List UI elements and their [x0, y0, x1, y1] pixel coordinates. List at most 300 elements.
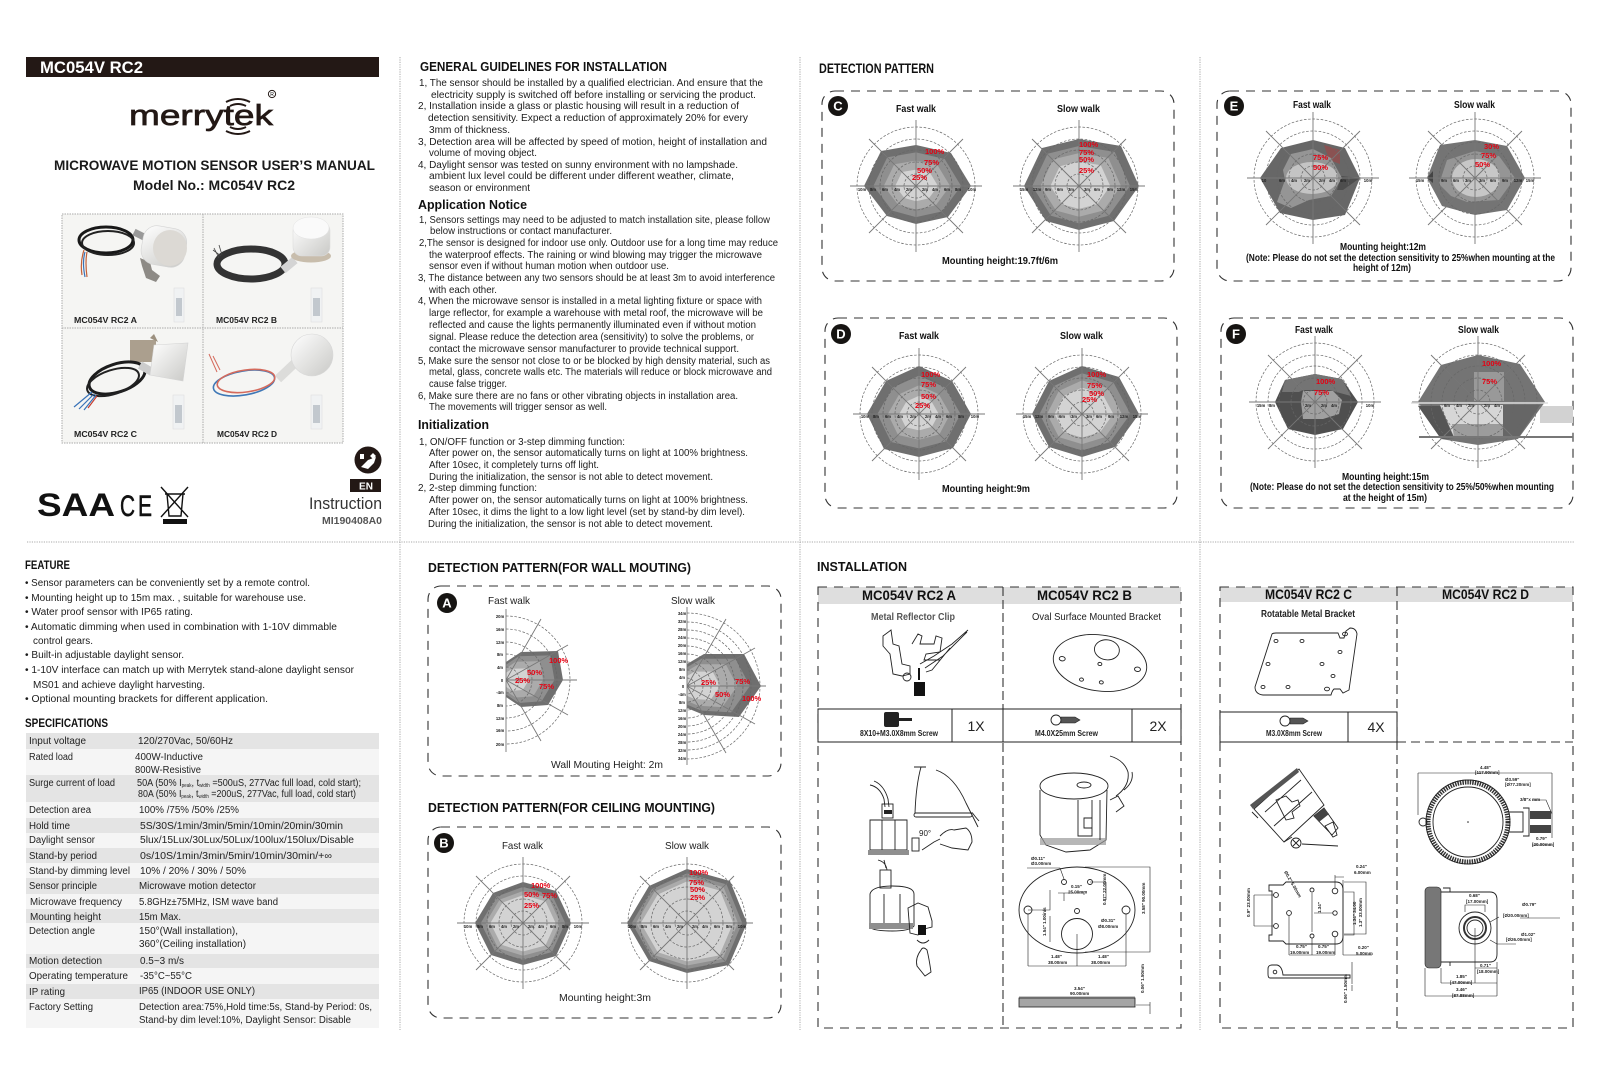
chart: C slow walk — [1013, 120, 1145, 252]
icon: screw A and label: 8X10+M3.0X8mm Screw — [860, 729, 939, 738]
spec table: Mounting height — [30, 912, 101, 923]
spec table: 5lux/15Lux/30Lux/50Lux/100lux/150lux/Disable — [140, 835, 354, 846]
initialization list: During the initialization, the sensor is not able to detect movement. — [429, 472, 713, 483]
chart: B fast walk: 8m — [477, 924, 483, 929]
chart: B fast walk: 10m — [464, 924, 472, 929]
chart: E slow walk: 3m — [1479, 178, 1485, 183]
chart: A fast walk: 8m — [497, 652, 503, 657]
chart: B fast walk: 4m — [501, 924, 507, 929]
chart: E fast walk: 4m — [1329, 178, 1335, 183]
chart: A slow walk: 12m — [678, 659, 686, 664]
chart: B fast walk: 2m — [513, 924, 519, 929]
panel: general guidelines — [418, 59, 778, 530]
chart: B fast walk: 10m — [574, 924, 582, 929]
chart: A slow walk: 8m — [679, 700, 685, 705]
chart: C slow walk: 6m — [1094, 187, 1100, 192]
application notice list: metal, glass, concrete walls etc. The materials will reduce or block microwave and — [429, 367, 772, 378]
application notice list: 1, Sensors settings may need to be adjusted to match installation site, please follow — [419, 215, 771, 226]
icon: screw C and label: M3.0X8mm Screw — [1266, 729, 1323, 738]
spec table: 10% / 20% / 30% / 50% — [140, 866, 246, 877]
drawing: rotatable bracket dimensions: 6.00mm — [1354, 870, 1371, 875]
chart: A slow walk: 32m — [678, 748, 686, 753]
drawing: sensor side view: [47.00mm] — [1450, 980, 1473, 985]
chart: B slow walk: 10m — [628, 924, 636, 929]
product B: MC054V RC2 B — [216, 316, 277, 325]
drawing: rotatable bracket dimensions: 19.00mm — [1290, 950, 1309, 955]
chart: F fast walk: 75% — [1314, 388, 1329, 397]
spec table: Detection area — [29, 805, 91, 816]
chart: F fast walk — [1249, 336, 1381, 468]
chart: A slow walk: 16m — [678, 651, 686, 656]
product D: MC054V RC2 D — [217, 430, 277, 439]
panel: pattern C: Slow walk — [1057, 103, 1100, 115]
column heading C: MC054V RC2 C — [1265, 586, 1352, 602]
chart: A slow walk: 20m — [678, 643, 686, 648]
spec table: IP rating — [29, 987, 65, 998]
application notice list: large reflector, for example a warehouse with metal roof, the microwave will be — [429, 308, 763, 319]
chart: B slow walk: 8m — [641, 924, 647, 929]
logo: merrytek: merrytek — [129, 100, 274, 132]
chart: F fast walk: 15m — [1257, 403, 1265, 408]
application notice list: reflected and cause the lights permanently illuminated even if without motion — [429, 320, 756, 331]
chart: D slow walk: 75% — [1087, 381, 1102, 390]
drawing: sensor top view: 3/8"x mm — [1520, 797, 1540, 802]
chart: F fast walk: 2m — [1305, 403, 1311, 408]
drawing: rotatable bracket — [1255, 628, 1357, 695]
feature list: MS01 and achieve daylight harvesting. — [33, 680, 205, 691]
caption: E mounting note: height of 12m) — [1353, 262, 1411, 274]
chart: C slow walk: 12m — [1033, 187, 1041, 192]
chart: C fast walk: 10m — [968, 187, 976, 192]
drawing: oval bracket side view: 3.54" — [1074, 986, 1085, 991]
chart: D slow walk: 15m — [1133, 414, 1141, 419]
drawing: sensor side view: [Ø20.00mm] — [1503, 913, 1529, 918]
chart: B slow walk: 2m — [677, 924, 683, 929]
icon: screw C and label — [1266, 716, 1323, 738]
drawing: L bar profile: 0.06" 1.50mm — [1343, 974, 1348, 1003]
product B — [213, 217, 331, 325]
chart: C fast walk: 4m — [894, 187, 900, 192]
chart: D fast walk — [853, 348, 985, 480]
chart: F slow walk: 75% — [1482, 377, 1497, 386]
chart: F slow walk: 100% — [1482, 359, 1502, 368]
heading: feature: FEATURE — [25, 558, 70, 572]
drawing: oval bracket dimensions: 3.58" 90.00mm — [1141, 883, 1146, 914]
chart: B fast walk — [457, 857, 589, 989]
chart: A fast walk: 50% — [527, 668, 542, 677]
chart: D slow walk: 50% — [1089, 389, 1104, 398]
chart: D slow walk: 9m — [1108, 414, 1114, 419]
chart: D fast walk: 10m — [861, 414, 869, 419]
drawing: reflector clip installation: 90° — [919, 829, 931, 838]
chart: E slow walk: 9m — [1502, 178, 1508, 183]
chart: D slow walk: 12m — [1035, 414, 1043, 419]
guidelines list: season or environment — [429, 183, 530, 194]
chart: A slow walk: 0 — [682, 684, 685, 689]
panel: pattern F: Fast walk — [1295, 324, 1333, 336]
chart: C fast walk: 10m — [858, 187, 866, 192]
chart: D fast walk: 6m — [885, 414, 891, 419]
caption: D mounting height: Mounting height:9m — [942, 483, 1030, 495]
chart: C fast walk: 6m — [944, 187, 950, 192]
logo: merrytek — [129, 90, 276, 134]
initialization list: After 10sec, it dims the light to a low light level (set by stand-by dim level). — [429, 507, 745, 518]
drawing: oval bracket dimensions: Ø8.00mm — [1098, 924, 1118, 929]
spec table: Microwave frequency — [30, 897, 122, 908]
drawing: sensor top view: [Ø77.20mm] — [1505, 782, 1531, 787]
column heading B: MC054V RC2 B — [1037, 587, 1132, 603]
chart: F slow walk: 2m — [1484, 403, 1490, 408]
application notice list: sensor even if without human motion when outdoor use. — [429, 261, 669, 272]
chart: C slow walk: 6m — [1057, 187, 1063, 192]
spec table — [26, 733, 379, 1028]
spec table: Detection area:75%,Hold time:5s, Stand-by Period: 0s, — [139, 1002, 372, 1013]
panel: pattern A: A — [442, 596, 452, 610]
panel: features — [25, 558, 355, 705]
drawing: rotatable bracket dimensions — [1246, 864, 1373, 956]
panel: installation C and D — [1220, 586, 1573, 1028]
chart: D fast walk: 100% — [921, 370, 941, 379]
chart: E slow walk — [1409, 112, 1541, 244]
drawing: oval bracket dimensions: 1.54" 1.00in/s — [1042, 907, 1047, 936]
drawing: sensor side view: Ø1.02" — [1521, 932, 1535, 937]
spec table: Detection angle — [29, 926, 95, 937]
chart: A fast walk: 16m — [496, 627, 504, 632]
icon: screw A and label — [860, 712, 939, 738]
spec table: peak — [181, 794, 192, 800]
chart: D slow walk: 12m — [1120, 414, 1128, 419]
chart: E slow walk: 50% — [1475, 160, 1490, 169]
drawing: sensor top view: [20.00mm] — [1532, 842, 1555, 847]
initialization list: After 10sec, it completely turns off light. — [429, 460, 599, 471]
chart: C fast walk: 4m — [932, 187, 938, 192]
chart: F slow walk: 4m — [1456, 403, 1462, 408]
panel: pattern C — [822, 91, 1174, 281]
chart: A slow walk: 34m — [678, 611, 686, 616]
drawing: sensor side view: [18.00mm] — [1477, 969, 1500, 974]
drawing: sensor top view — [1418, 765, 1555, 864]
spec table: Stand-by period — [29, 851, 97, 862]
drawing: oval bracket dimensions: 38.00mm — [1091, 960, 1110, 965]
application notice list: with each other. — [428, 285, 497, 296]
panel: specifications — [25, 716, 379, 1028]
product A — [74, 223, 189, 325]
panel: pattern E: Fast walk — [1293, 99, 1331, 111]
chart: A slow walk: 28m — [678, 740, 686, 745]
drawing: rotatable bracket dimensions: 0.75" — [1318, 944, 1329, 949]
chart: E fast walk — [1247, 112, 1379, 244]
caption: E mounting note: Mounting height:12m — [1340, 241, 1426, 253]
chart: A fast walk: 75% — [539, 682, 554, 691]
spec table: Factory Setting — [29, 1002, 93, 1013]
chart: B slow walk: 10m — [738, 924, 746, 929]
application notice list: 4, When the microwave sensor is installed in a metal lighting fixture or space with — [418, 296, 762, 307]
feature list: • Mounting height up to 15m max. , suitable for warehouse use. — [25, 593, 306, 604]
panel: pattern C: C — [833, 98, 843, 114]
icon: screw B and label: M4.0X25mm Screw — [1035, 729, 1099, 738]
drawing: sensor top view: 0.79" — [1536, 836, 1547, 841]
drawing: sensor side view: 0.71" — [1480, 963, 1491, 968]
application notice list: below instructions or contact manufacturer. — [430, 226, 612, 237]
guidelines list: 4, Daylight sensor was tested on sunny environment with no lampshade. — [418, 160, 738, 171]
spec table: 50A (50% I — [137, 778, 186, 789]
chart: F slow walk: 4m — [1494, 403, 1500, 408]
caption: E mounting note — [1246, 241, 1555, 274]
panel: pattern E — [1217, 91, 1571, 281]
chart: D fast walk: 4m — [897, 414, 903, 419]
chart: F fast walk: 2m — [1321, 403, 1327, 408]
chart: C slow walk: 15m — [1130, 187, 1138, 192]
chart: D fast walk: 25% — [915, 401, 930, 410]
chart: A fast walk — [496, 609, 577, 752]
bracket name C: Rotatable Metal Bracket — [1261, 609, 1356, 620]
chart: A fast walk: 4m — [497, 665, 503, 670]
chart: A slow walk — [678, 607, 766, 765]
caption: C mounting height: Mounting height:19.7ft/6m — [942, 255, 1058, 267]
feature list: • Water proof sensor with IP65 rating. — [25, 607, 193, 618]
chart: E fast walk: 10 — [1262, 178, 1267, 183]
drawing: oval surface mount installation — [1040, 756, 1132, 852]
initialization list: During the initialization, the sensor is not able to detect movement. — [428, 519, 713, 530]
spec table: 120/270Vac, 50/60Hz — [138, 736, 233, 747]
chart: C slow walk: 75% — [1079, 148, 1094, 157]
drawing: L bar profile — [1268, 962, 1352, 1003]
chart: B slow walk: 100% — [689, 868, 709, 877]
drawing: oval bracket dimensions: 38.00mm — [1048, 960, 1067, 965]
drawing: sensor top view: 4.48" — [1480, 765, 1491, 770]
chart: A slow walk: 12m — [678, 708, 686, 713]
chart: B slow walk — [621, 857, 753, 989]
initialization list: 1, ON/OFF function or 3-step dimming function: — [419, 437, 625, 448]
chart: C slow walk: 9m — [1107, 187, 1113, 192]
heading: wall mounting: DETECTION PATTERN(FOR WALL MOUTING) — [428, 560, 691, 575]
chart: F fast walk: 10m — [1366, 403, 1374, 408]
drawing: oval bracket dimensions: 0.15" — [1071, 884, 1082, 889]
chart: C fast walk: 2m — [906, 187, 912, 192]
spec table: Rated load — [29, 752, 73, 763]
chart: E fast walk: 2m — [1304, 178, 1310, 183]
spec table: Operating temperature — [29, 971, 128, 982]
chart: F slow walk: 2m — [1468, 403, 1474, 408]
spec table: 360°(Ceiling installation) — [139, 939, 246, 950]
chart: A fast walk: 100% — [549, 656, 569, 665]
drawing: rotatable bracket dimensions: 1.34" 34.00 — [1352, 901, 1357, 925]
heading: initialization: Initialization — [418, 417, 489, 432]
panel: pattern B — [428, 827, 781, 1018]
drawing: rotatable bracket dimensions: 0.9" 23.00mm — [1246, 888, 1251, 917]
language tag and instruction code: Instruction — [309, 494, 382, 513]
drawing: oval bracket side view: 90.00mm — [1070, 991, 1089, 996]
chart: B slow walk: 6m — [714, 924, 720, 929]
chart: A fast walk: 25% — [515, 676, 530, 685]
chart: C slow walk: 3m — [1084, 187, 1090, 192]
chart: C slow walk: 100% — [1079, 140, 1099, 149]
heading: ceiling mounting: DETECTION PATTERN(FOR CEILING MOUNTING) — [428, 800, 715, 815]
certification marks — [37, 487, 188, 524]
spec table: 100% /75% /50% /25% — [139, 805, 239, 816]
chart: E slow walk: 30% — [1484, 142, 1499, 151]
chart: D slow walk: 6m — [1059, 414, 1065, 419]
language tag and instruction code: MI190408A0 — [322, 516, 382, 527]
spec table: Input voltage — [29, 736, 86, 747]
application notice list: 5, Make sure the sensor not close to or be blocked by high density material, such as — [418, 356, 770, 367]
caption: F mounting note: at the height of 15m) — [1343, 492, 1427, 504]
chart: C slow walk: 15m — [1020, 187, 1028, 192]
chart: F fast walk: 4m — [1331, 403, 1337, 408]
chart: A slow walk: 50% — [715, 690, 730, 699]
chart: C slow walk: 12m — [1117, 187, 1125, 192]
spec table: 5.8GHz±75MHz, ISM wave band — [139, 897, 278, 908]
chart: E fast walk: 4m — [1291, 178, 1297, 183]
chart: D slow walk — [1016, 348, 1148, 480]
drawing: rotatable bracket dimensions: 1.3" 33.00mm — [1358, 898, 1363, 927]
chart: C slow walk: 25% — [1079, 166, 1094, 175]
certification marks: C — [120, 490, 135, 523]
model header bar: MC054V RC2 — [40, 58, 143, 77]
feature list — [25, 578, 355, 705]
chart: B fast walk: 75% — [542, 891, 557, 900]
bracket name A: Metal Reflector Clip — [871, 612, 955, 623]
model header bar — [26, 57, 379, 77]
drawing: rotatable bracket dimensions: 0.24" — [1356, 864, 1367, 869]
guidelines list: electricity supply is switched off before installing or servicing the product. — [431, 90, 756, 101]
guidelines list: 1, The sensor should be installed by a qualified electrician. And ensure that the — [419, 78, 763, 89]
application notice list: 6, Make sure there are no fans or other vibrating objects in installation area. — [418, 391, 738, 402]
drawing: sensor side view: 3.46" — [1456, 987, 1467, 992]
title: Model No.: MC054V RC2 — [133, 177, 295, 193]
drawing: sensor top view: [117.90mm] — [1475, 770, 1500, 775]
chart: E fast walk: 50% — [1313, 163, 1328, 172]
chart: B slow walk: 50% — [690, 885, 705, 894]
spec table: 80A (50% I — [138, 789, 187, 800]
guidelines list: 3mm of thickness. — [429, 125, 510, 136]
chart: D fast walk: 10m — [971, 414, 979, 419]
panel: pattern B: Slow walk — [665, 840, 710, 852]
product C: MC054V RC2 C — [74, 430, 137, 439]
guidelines list: 3, Detection area will be affected by speed of motion, height of installation and — [418, 137, 767, 148]
panel: pattern D: D — [836, 326, 846, 342]
drawing: rotatable bracket dimensions: Ø0.2" 5.00mm — [1283, 870, 1302, 898]
spec table: Surge current of load — [29, 778, 115, 789]
chart: D slow walk: 3m — [1071, 414, 1077, 419]
spec table: Sensor principle — [29, 881, 97, 892]
chart: F slow walk — [1411, 336, 1573, 468]
chart: E slow walk: 6m — [1490, 178, 1496, 183]
chart: A slow walk: 75% — [735, 677, 750, 686]
application notice list — [418, 215, 778, 413]
chart: C fast walk: 8m — [870, 187, 876, 192]
caption: F mounting note: Mounting height:15m — [1342, 471, 1429, 483]
spec table: =500uS, 277Vac full load, cold start); — [210, 778, 361, 789]
spec table: -35°C~55°C — [140, 971, 192, 982]
chart: D fast walk: 8m — [958, 414, 964, 419]
drawing: oval bracket dimensions: 25.00mm — [1068, 890, 1087, 894]
drawing: rotatable bracket dimensions: 0.20" — [1358, 945, 1369, 950]
spec table: 0.5~3 m/s — [140, 956, 184, 967]
chart: A slow walk: 24m — [678, 732, 686, 737]
chart: A slow walk: 16m — [678, 716, 686, 721]
chart: D slow walk: 9m — [1048, 414, 1054, 419]
drawing: sensor side view: 1.85" — [1456, 974, 1467, 979]
chart: A fast walk: -4m — [496, 690, 504, 695]
guidelines list: ambient lux level could be different under different weather, climate, — [429, 171, 734, 182]
chart: A slow walk: 20m — [678, 724, 686, 729]
chart: D fast walk: 50% — [921, 392, 936, 401]
spec table: , t — [191, 789, 199, 800]
chart: E fast walk: 10m — [1364, 178, 1372, 183]
chart: C fast walk: 8m — [955, 187, 961, 192]
drawing: sensor side view: [87.88mm] — [1452, 993, 1475, 998]
initialization list — [418, 437, 748, 530]
panel: pattern D: Slow walk — [1060, 330, 1103, 342]
chart: E slow walk: 6m — [1453, 178, 1459, 183]
spec table: Stand-by dimming level — [29, 866, 130, 877]
drawing: oval bracket dimensions — [1019, 856, 1150, 966]
title: MICROWAVE MOTION SENSOR USER’S MANUAL — [54, 157, 375, 173]
application notice list: signal. Please reduce the detection area (sensitivity) to solve the problems, or — [429, 332, 755, 343]
feature list: • Sensor parameters can be conveniently set by a remote control. — [25, 578, 310, 589]
chart: F fast walk: 8m — [1269, 403, 1275, 408]
drawing: oval bracket dimensions: 1.48" — [1098, 954, 1109, 959]
chart: B fast walk: 6m — [550, 924, 556, 929]
chart: D slow walk: 25% — [1082, 395, 1097, 404]
chart: C slow walk: 50% — [1079, 155, 1094, 164]
drawing: oval bracket dimensions: 0.87" 22.00mm — [1102, 874, 1107, 905]
chart: A slow walk: -4m — [678, 692, 686, 697]
chart: B slow walk: 75% — [689, 878, 704, 887]
panel: pattern A: Slow walk — [671, 595, 716, 607]
chart: A fast walk: 0 — [501, 678, 504, 683]
drawing: sensor side view: Ø0.79" — [1522, 902, 1536, 907]
chart: A slow walk: 8m — [679, 667, 685, 672]
application notice list: 3, The distance between any two sensors should be at least 3m to avoid interference — [418, 273, 775, 284]
chart: A slow walk: 25% — [701, 678, 716, 687]
spec table: 15m Max. — [139, 912, 181, 923]
guidelines list — [418, 78, 767, 194]
chart: D fast walk: 2m — [910, 414, 916, 419]
drawing: oval bracket dimensions: Ø0.11" — [1031, 856, 1045, 861]
spec table: Daylight sensor — [29, 835, 96, 846]
application notice list: contact the microwave sensor manufacturer to provide technical support. — [429, 344, 739, 355]
chart: D fast walk: 75% — [921, 380, 936, 389]
column heading D: MC054V RC2 D — [1442, 586, 1529, 602]
chart: C fast walk: 6m — [882, 187, 888, 192]
heading: detection pattern: DETECTION PATTERN — [819, 60, 934, 76]
product D — [209, 334, 333, 439]
drawing: sensor side view: [17.00mm] — [1466, 899, 1489, 904]
language tag and instruction code — [309, 479, 382, 527]
chart: A fast walk: 12m — [496, 640, 504, 645]
panel: pattern C: Fast walk — [896, 103, 936, 115]
chart: E fast walk: 6m — [1340, 178, 1346, 183]
chart: F slow walk: 6m — [1444, 403, 1450, 408]
spec table: , t — [192, 778, 199, 789]
chart: A fast walk: 20m — [496, 614, 504, 619]
chart: C fast walk — [850, 120, 982, 252]
panel: pattern D — [825, 318, 1177, 508]
chart: D fast walk: 4m — [935, 414, 941, 419]
chart: A slow walk: 34m — [678, 756, 686, 761]
chart: A slow walk: 28m — [678, 627, 686, 632]
chart: D slow walk: 15m — [1023, 414, 1031, 419]
drawing: oval bracket dimensions: 1.48" — [1051, 954, 1062, 959]
panel: cover — [26, 57, 382, 527]
chart: B slow walk: 4m — [665, 924, 671, 929]
chart: E slow walk: 9m — [1441, 178, 1447, 183]
heading: application notice: Application Notice — [418, 197, 527, 212]
chart: C fast walk: 100% — [925, 147, 945, 156]
drawing: oval bracket side view — [1019, 964, 1150, 1014]
